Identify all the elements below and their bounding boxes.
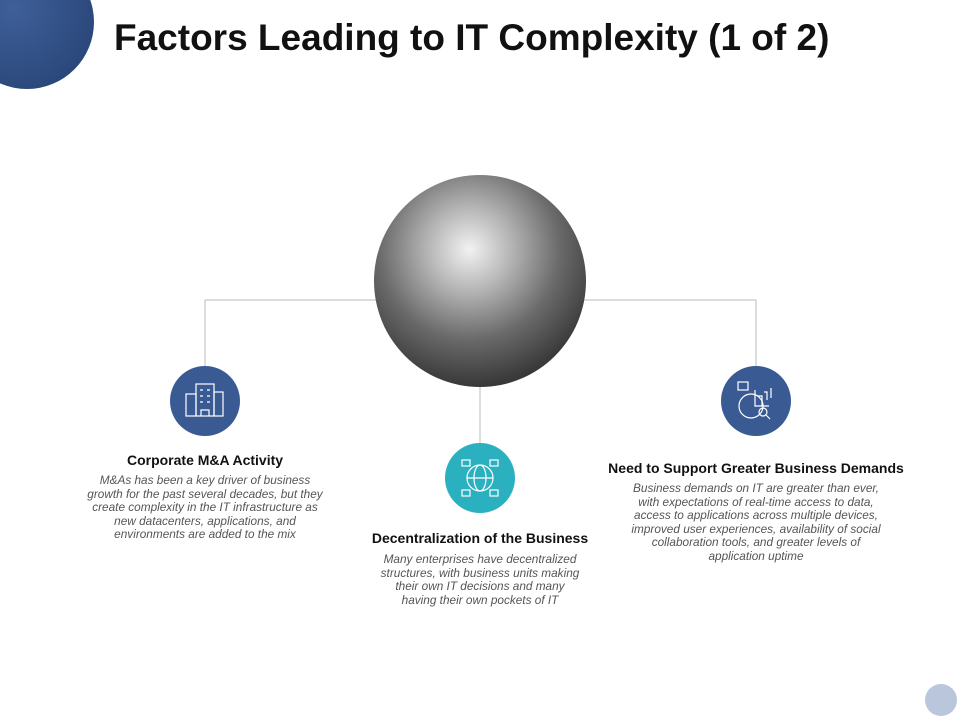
- block: Corporate M&A Activity: [87, 452, 324, 541]
- block: Greater Business Demands: with expectations of real-time access to data,: [638, 495, 874, 509]
- block: Corporate M&A Activity: new datacenters, applications, and: [114, 514, 296, 528]
- central image circle: [374, 175, 586, 387]
- block: Decentralization: Decentralization of the Business: [372, 530, 588, 546]
- block: Greater Business Demands: access to applications across multiple devices,: [634, 508, 878, 522]
- block: Greater Business Demands: application uptime: [708, 549, 804, 563]
- block: Greater Business Demands: [608, 460, 904, 563]
- title: Factors Leading to IT Complexity (1 of 2): [114, 17, 829, 58]
- block: Decentralization: Many enterprises have decentralized: [384, 552, 576, 566]
- block: Greater Business Demands: improved user experiences, availability of social: [631, 522, 881, 536]
- block: Greater Business Demands: collaboration tools, and greater levels of: [652, 535, 860, 549]
- block: Greater Business Demands: Business demands on IT are greater than ever,: [633, 481, 879, 495]
- block: Decentralization: having their own pockets of IT: [402, 593, 558, 607]
- decorative circle top-left: [0, 0, 94, 89]
- block: Decentralization: structures, with business units making: [381, 566, 579, 580]
- block: Decentralization: their own IT decisions and many: [395, 579, 565, 593]
- block: Corporate M&A Activity: Corporate M&A Activity: [127, 452, 283, 468]
- block: Corporate M&A Activity: environments are added to the mix: [114, 527, 296, 541]
- icon: business chart: [721, 366, 791, 436]
- block: Corporate M&A Activity: M&As has been a key driver of business: [100, 473, 310, 487]
- block: Greater Business Demands: Need to Support Greater Business Demands: [608, 460, 904, 476]
- icon: globe network: [445, 443, 515, 513]
- icon: building: [170, 366, 240, 436]
- block: Corporate M&A Activity: create complexity in the IT infrastructure as: [92, 500, 318, 514]
- block: Corporate M&A Activity: growth for the past several decades, but they: [87, 487, 323, 501]
- decorative circle bottom-right: [925, 684, 957, 716]
- block: Decentralization: [372, 530, 588, 607]
